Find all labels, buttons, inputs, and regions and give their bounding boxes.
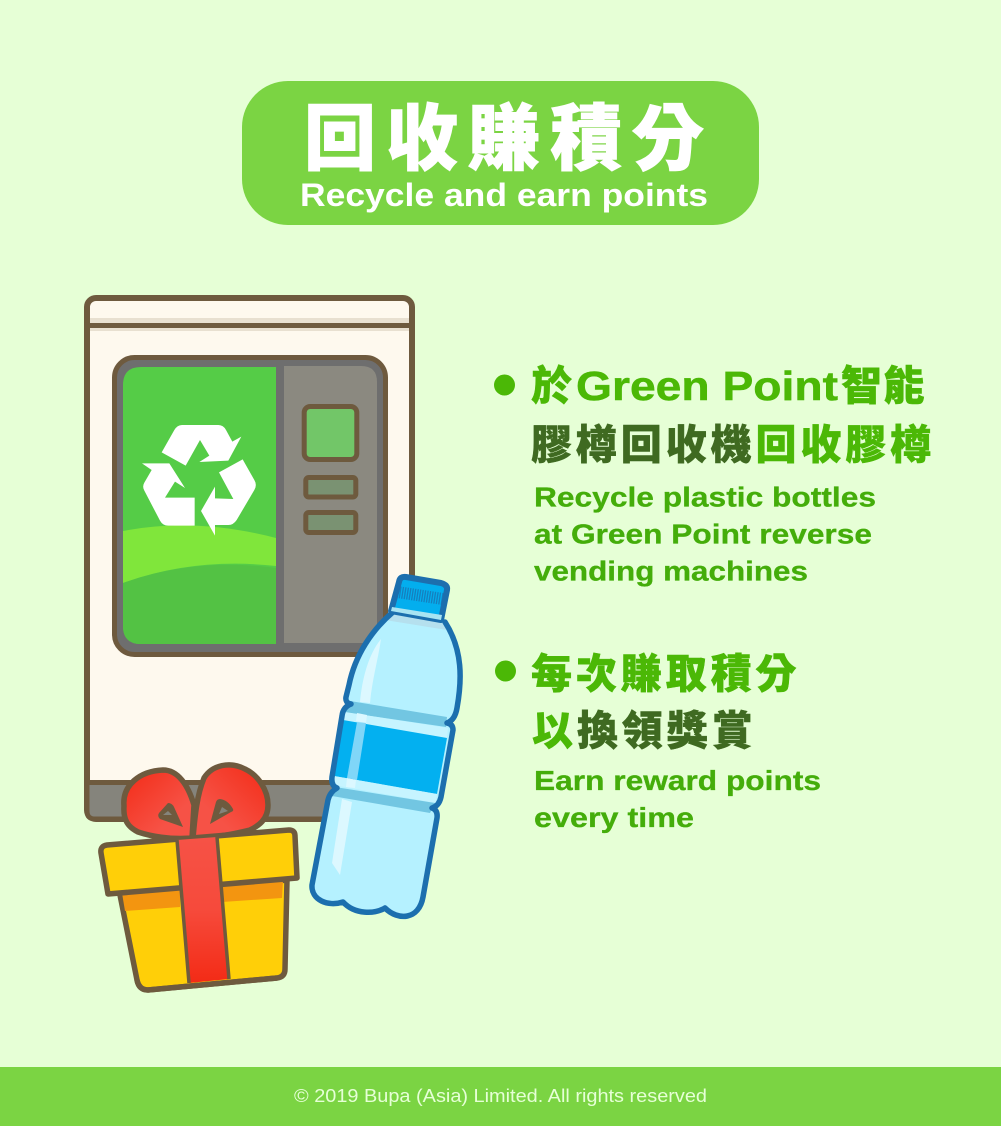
machine base xyxy=(87,782,412,819)
copyright text: © 2019 Bupa (Asia) Limited. All rights reserved xyxy=(294,1086,707,1106)
bottle highlight xyxy=(332,639,381,875)
bottle body xyxy=(312,612,460,916)
bottle outline xyxy=(312,612,460,916)
gift shadow band xyxy=(122,880,283,911)
gift lid xyxy=(101,830,297,894)
Chinese heading line one: 智能 xyxy=(841,363,926,409)
cap ring xyxy=(391,607,442,620)
Chinese heading line one: 於 xyxy=(531,363,572,409)
icon: water bottle xyxy=(312,577,460,916)
English description: Recycle plastic bottles xyxy=(534,482,876,512)
gift bottom edge xyxy=(137,978,277,990)
panel display xyxy=(304,406,357,460)
gift ribbon xyxy=(177,837,229,983)
light hill xyxy=(123,525,276,583)
English description: vending machines xyxy=(534,556,808,586)
bottle neck shade xyxy=(385,611,447,630)
icon: gift box xyxy=(101,765,297,990)
badge background xyxy=(242,81,759,225)
Chinese heading line one: Green Point xyxy=(576,363,838,409)
bullet xyxy=(494,374,515,396)
English description xyxy=(534,765,821,833)
green screen xyxy=(123,367,276,644)
English description: at Green Point reverse xyxy=(534,518,872,550)
Chinese heading line two: 以換領獎賞 xyxy=(532,708,757,754)
footer bar xyxy=(0,1067,1001,1126)
English description: Earn reward points xyxy=(534,765,821,796)
bullet xyxy=(495,660,516,682)
vending machine illustration xyxy=(87,298,412,819)
bottle cap xyxy=(391,577,447,620)
icon: recycling arrows xyxy=(142,425,256,536)
gift box body xyxy=(120,880,287,990)
machine window frame xyxy=(114,358,386,654)
bottle label xyxy=(332,701,448,813)
Chinese heading line two: 膠樽回收機回收膠樽 xyxy=(531,422,935,468)
gift bow xyxy=(124,765,268,839)
control panel xyxy=(284,366,377,643)
Chinese heading line one: 每次賺取積分 xyxy=(531,651,800,697)
cap ridges xyxy=(397,592,443,599)
panel slot two xyxy=(306,512,356,532)
English description: every time xyxy=(534,802,694,833)
panel slot one xyxy=(306,478,356,497)
English description xyxy=(534,482,876,586)
title badge xyxy=(242,81,759,225)
English subtitle: Recycle and earn points xyxy=(300,177,708,213)
dark hill xyxy=(123,565,276,644)
Chinese title: 回收賺積分 xyxy=(304,100,714,180)
point two xyxy=(495,651,821,833)
machine body xyxy=(87,298,412,819)
machine top strip xyxy=(90,318,409,331)
point one xyxy=(494,363,935,586)
